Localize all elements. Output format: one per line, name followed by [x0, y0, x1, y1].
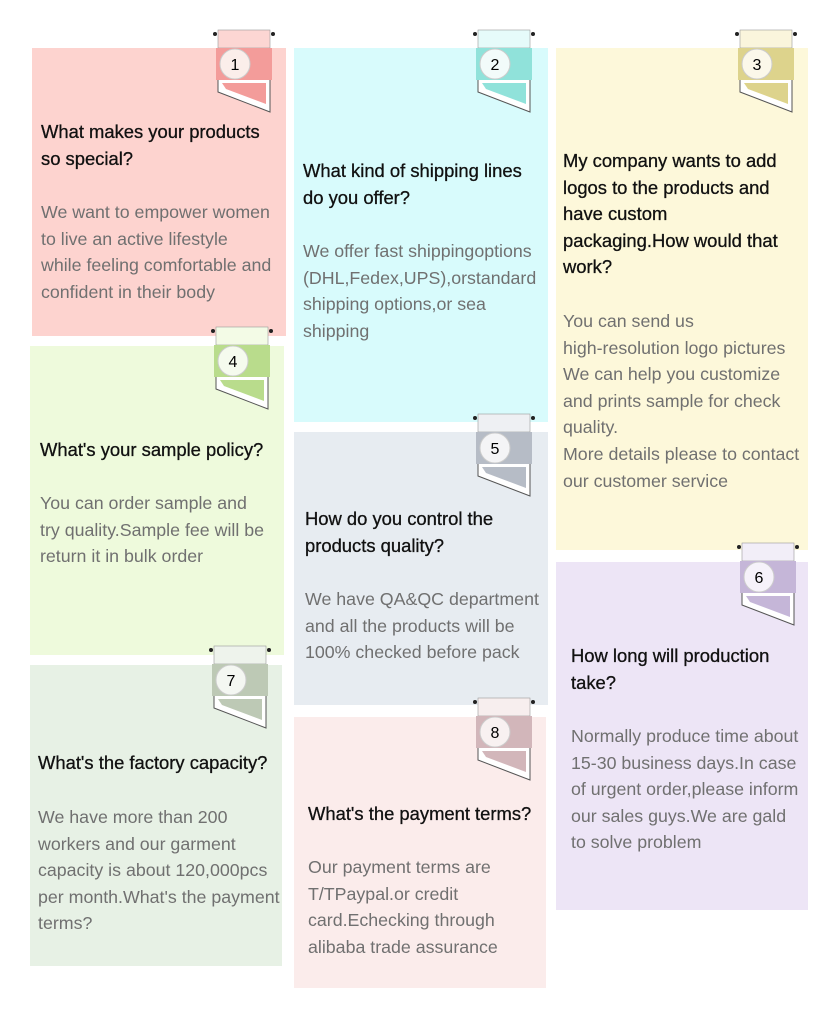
question 5: How do you control the — [305, 508, 493, 529]
question 8: What's the payment terms? — [308, 803, 531, 824]
answer 8 — [308, 857, 498, 957]
icon: tag 7: 7 — [227, 673, 236, 690]
icon: tag 5: 5 — [491, 441, 500, 458]
question 3: My company wants to add — [563, 150, 777, 171]
answer 3: high-resolution logo pictures — [563, 338, 785, 358]
icon: tag 2 — [473, 30, 535, 113]
answer 6: Normally produce time about — [571, 726, 798, 746]
panel 5 — [294, 432, 548, 705]
answer 3: our customer service — [563, 471, 728, 491]
question 2 — [302, 160, 522, 208]
question 1: What makes your products — [41, 121, 260, 142]
panel 3 — [556, 48, 808, 550]
question 3: work? — [563, 256, 612, 277]
answer 4: try quality.Sample fee will be — [40, 520, 264, 540]
question 2: do you offer? — [303, 187, 410, 208]
answer 7: workers and our garment — [38, 834, 236, 854]
answer 6: 15-30 business days.In case — [571, 753, 796, 773]
icon: tag 4: 4 — [229, 354, 238, 371]
answer 2: (DHL,Fedex,UPS),orstandard — [303, 268, 536, 288]
question 7: What's the factory capacity? — [38, 752, 267, 773]
panel 2 — [294, 48, 548, 422]
answer 8: alibaba trade assurance — [308, 937, 498, 957]
answer 6: our sales guys.We are gald — [571, 806, 786, 826]
answer 1: confident in their body — [41, 282, 215, 302]
icon: tag 6 — [737, 542, 799, 626]
answer 2: shipping — [303, 321, 369, 341]
question 1: so special? — [41, 148, 133, 169]
answer 7: We have more than 200 — [38, 807, 227, 827]
answer 5: We have QA&QC department — [305, 589, 539, 609]
answer 5: 100% checked before pack — [305, 642, 520, 662]
answer 3: You can send us — [563, 311, 694, 331]
question 3 — [562, 150, 778, 277]
icon: tag 4 — [211, 326, 273, 410]
icon: tag 1 — [213, 30, 275, 113]
question 3: have custom — [563, 203, 667, 224]
answer 5: and all the products will be — [305, 616, 515, 636]
panel 6 — [556, 562, 808, 910]
question 2: What kind of shipping lines — [303, 160, 522, 181]
answer 2 — [303, 241, 536, 341]
answer 4 — [40, 493, 264, 566]
panel 1 — [32, 48, 286, 336]
icon: tag 2: 2 — [491, 57, 500, 74]
answer 3: We can help you customize — [563, 364, 780, 384]
question 6: take? — [571, 672, 616, 693]
answer 8: Our payment terms are — [308, 857, 491, 877]
answer 1: to live an active lifestyle — [41, 229, 228, 249]
question 1 — [40, 121, 260, 170]
answer 2: shipping options,or sea — [303, 294, 486, 314]
question 3: packaging.How would that — [563, 230, 778, 251]
answer 5 — [305, 589, 539, 662]
answer 3: quality. — [563, 417, 618, 437]
answer 6 — [571, 726, 798, 852]
icon: tag 3: 3 — [753, 57, 762, 74]
question 6 — [571, 645, 769, 693]
question 6: How long will production — [571, 645, 769, 666]
question 5: products quality? — [305, 535, 444, 556]
answer 3 — [563, 311, 800, 491]
answer 7: terms? — [38, 913, 92, 933]
answer 1: while feeling comfortable and — [41, 255, 271, 275]
answer 7: per month.What's the payment — [38, 887, 280, 907]
answer 1 — [41, 202, 271, 302]
answer 4: return it in bulk order — [40, 546, 203, 566]
icon: tag 6: 6 — [755, 570, 764, 587]
panel 4 — [30, 346, 284, 655]
answer 1: We want to empower women — [41, 202, 270, 222]
answer 7 — [38, 807, 280, 933]
panel 8 — [294, 717, 546, 988]
icon: tag 5 — [473, 414, 535, 497]
answer 6: to solve problem — [571, 832, 701, 852]
answer 3: and prints sample for check — [563, 391, 780, 411]
question 4: What's your sample policy? — [40, 439, 263, 460]
icon: tag 3 — [735, 30, 797, 113]
icon: tag 7 — [209, 646, 271, 729]
answer 6: of urgent order,please inform — [571, 779, 798, 799]
answer 4: You can order sample and — [40, 493, 247, 513]
icon: tag 1: 1 — [231, 57, 240, 74]
answer 2: We offer fast shippingoptions — [303, 241, 532, 261]
icon: tag 8: 8 — [491, 725, 500, 742]
question 5 — [305, 508, 493, 556]
answer 3: More details please to contact — [563, 444, 799, 464]
answer 8: card.Echecking through — [308, 910, 495, 930]
question 3: logos to the products and — [563, 177, 770, 198]
answer 8: T/TPaypal.or credit — [308, 884, 458, 904]
answer 7: capacity is about 120,000pcs — [38, 860, 267, 880]
icon: tag 8 — [473, 698, 535, 781]
panel 7 — [30, 665, 282, 966]
